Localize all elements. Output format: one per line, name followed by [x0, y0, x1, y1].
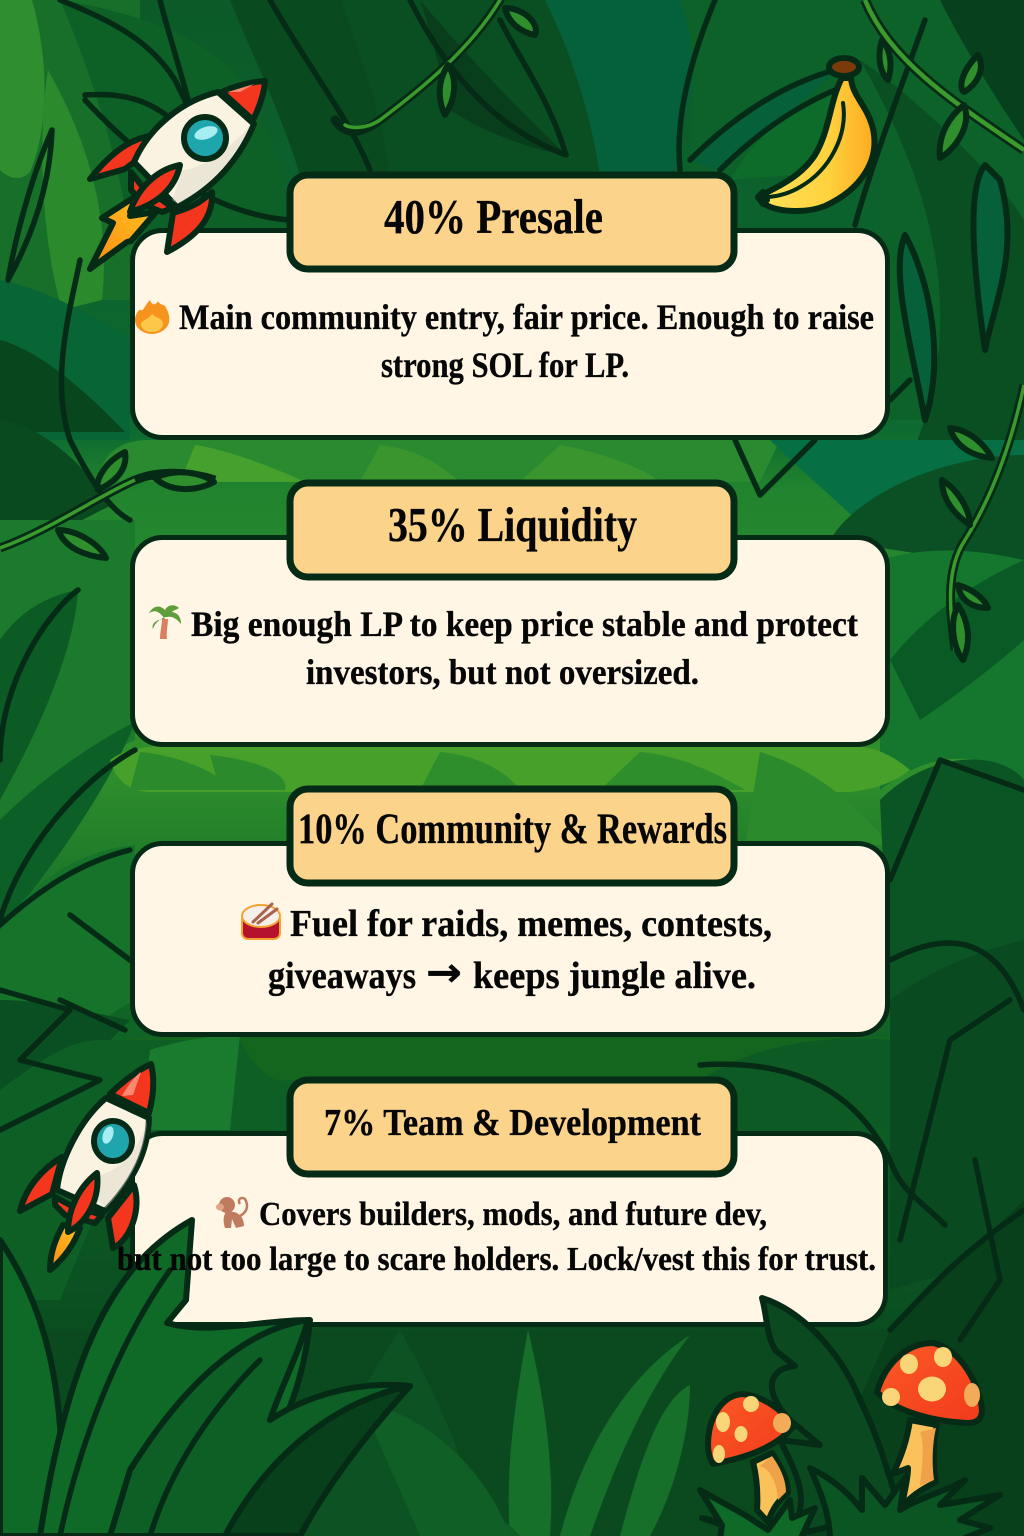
nose — [110, 1064, 153, 1113]
icon: rocket lower left — [20, 1064, 153, 1270]
icon: palm tree — [149, 605, 181, 639]
icon: small mushroom — [708, 1394, 793, 1522]
left fin — [90, 136, 150, 179]
text block: community: giveaways — [268, 955, 416, 997]
text block: team: but not too large to scare holders. Lock/vest this for trust. — [117, 1241, 876, 1278]
icon: banana — [758, 58, 874, 211]
text block: liquidity — [191, 604, 858, 692]
left fin — [20, 1157, 62, 1211]
right fin — [167, 192, 212, 252]
nozzle — [55, 1197, 102, 1223]
body — [134, 92, 254, 207]
second gap band — [110, 746, 910, 792]
text block: liquidity: Big enough LP to keep price stable and protect — [191, 604, 858, 644]
text block: presale: Main community entry, fair price. Enough to raise — [179, 297, 874, 337]
text block: presale: strong SOL for LP. — [381, 345, 629, 385]
body — [57, 1098, 149, 1211]
heading: 40% Presale: 40% Presale — [384, 189, 603, 244]
right fin — [108, 1185, 137, 1248]
grass tufts — [700, 1468, 1000, 1536]
foreground leaves bottom left — [0, 1220, 410, 1536]
flame — [50, 1225, 80, 1270]
heading: 35% Liquidity: 35% Liquidity — [388, 497, 637, 552]
text block: team: Covers builders, mods, and future dev, — [259, 1196, 767, 1233]
panel: team and development — [132, 1080, 886, 1324]
first gap band — [100, 440, 780, 482]
lower band — [130, 1037, 890, 1080]
panel: community and rewards — [132, 789, 888, 1034]
icon: large mushroom — [877, 1343, 982, 1507]
window — [184, 117, 226, 159]
window — [94, 1121, 132, 1161]
icon: rocket top left — [90, 81, 265, 269]
foreground leaf bottom right — [762, 1298, 900, 1536]
icon: monkey — [216, 1197, 247, 1228]
text block: liquidity: investors, but not oversized. — [306, 652, 699, 692]
center fin — [68, 1173, 97, 1232]
icon: fire — [135, 300, 169, 334]
heading: 10% Community & Rewards: 10% Community & Rewards — [298, 806, 727, 853]
panel: liquidity — [132, 483, 888, 744]
flame — [90, 196, 156, 269]
center fin — [130, 165, 180, 212]
text block: team — [117, 1196, 876, 1278]
panel: presale — [132, 175, 888, 438]
icon: drum — [242, 904, 280, 939]
top left region — [0, 0, 140, 300]
vines — [0, 0, 1024, 660]
nozzle — [131, 172, 173, 212]
text block: presale — [179, 297, 874, 385]
text block: community: → — [426, 950, 462, 996]
mid left — [0, 280, 130, 440]
nose — [222, 81, 265, 120]
heading: 7% Team & Development: 7% Team & Development — [324, 1102, 701, 1144]
text block: community — [268, 903, 772, 997]
text block: community: Fuel for raids, memes, contests, — [290, 903, 772, 945]
text block: community: keeps jungle alive. — [473, 955, 756, 997]
